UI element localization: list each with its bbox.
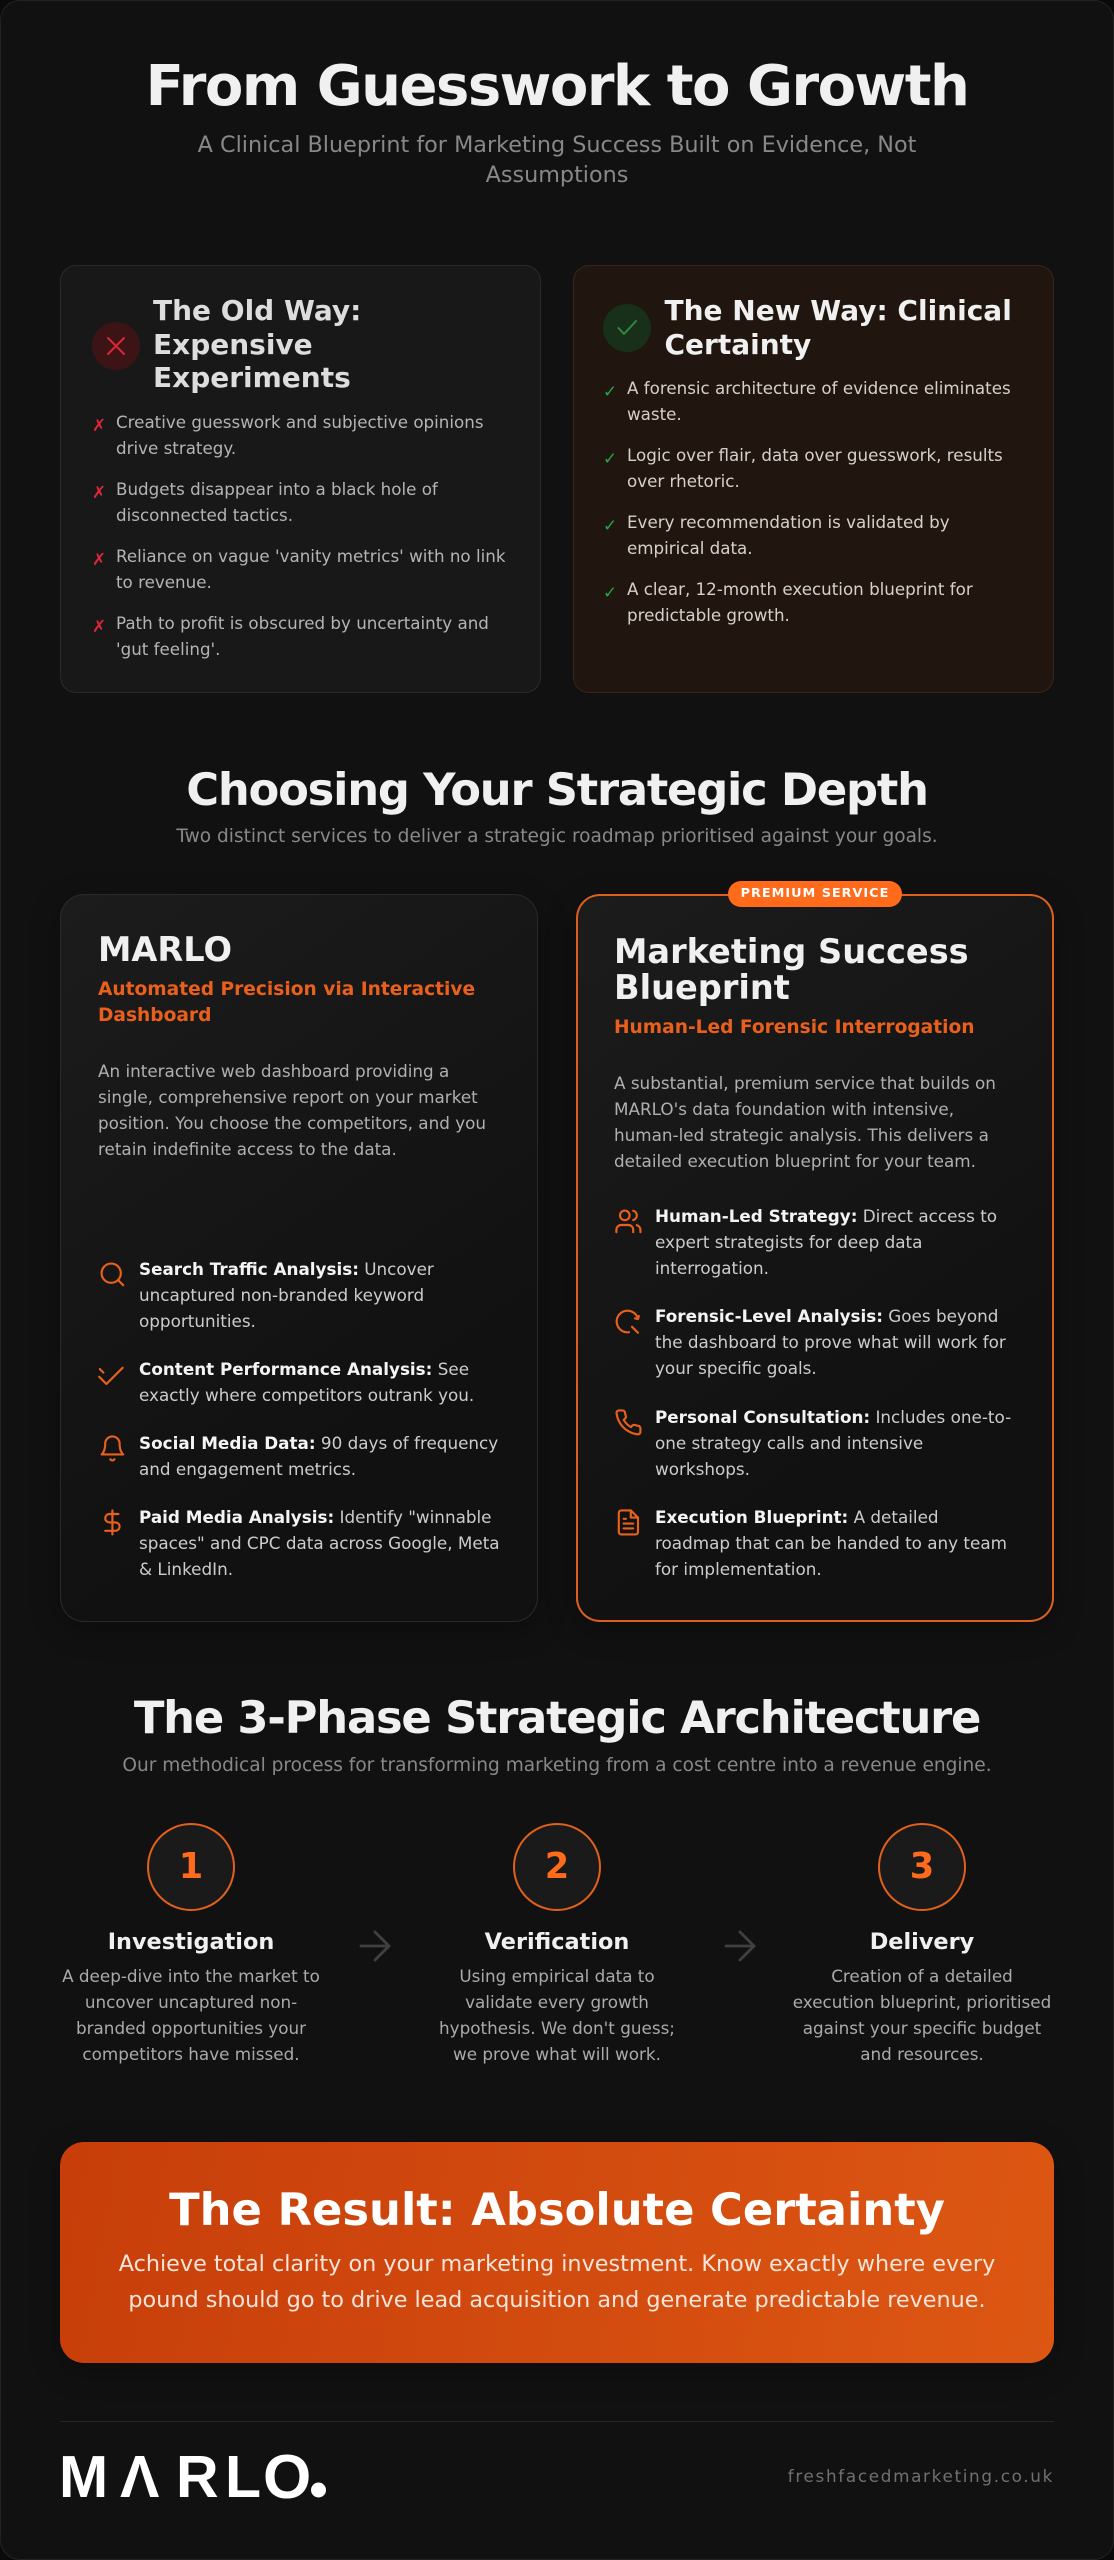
description: blueprint: A substantial, premium service that builds on — [614, 1073, 996, 1093]
text: result: Achieve total clarity on your marketing investment. Know exactly where every — [119, 2251, 995, 2277]
item: creative guesswork: ✗ — [92, 415, 106, 435]
feature: personal consultation: Personal Consultation: Includes one-to- — [655, 1407, 1011, 1427]
feature: paid media — [104, 1507, 500, 1579]
icon: check — [98, 1366, 124, 1386]
feature: execution blueprint: Execution Blueprint: A detailed — [655, 1507, 939, 1527]
tagline: MARLO: Automated Precision via Interactive — [98, 979, 475, 1000]
item: forensic architecture: A forensic architecture of evidence eliminates — [627, 378, 1011, 398]
phase 2 number — [513, 1823, 601, 1911]
item: logic over flair: Logic over flair, data over guesswork, results — [627, 445, 1003, 465]
phase 1 description: branded opportunities your — [76, 2018, 306, 2038]
subheading: strategic depth: Two distinct services to deliver a strategic roadmap prioritised against your goals. — [176, 826, 938, 847]
heading: new way: Certainty — [664, 328, 811, 361]
heading: old way: Experiments — [153, 361, 351, 394]
description: MARLO: single, comprehensive report on your market — [98, 1087, 478, 1107]
heading: blueprint: Blueprint — [614, 968, 790, 1007]
phase 3 number: 3 — [910, 1846, 934, 1887]
item: budgets: disconnected tactics. — [116, 505, 293, 525]
heading: 3-phase architecture: The 3-Phase Strategic Architecture — [134, 1691, 980, 1744]
item: vanity metrics: to revenue. — [116, 572, 212, 592]
tagline: MARLO: Dashboard — [98, 1005, 211, 1026]
heading: old way: The Old Way: — [153, 294, 361, 327]
arrow: phase 1 to 2 — [360, 1930, 390, 1962]
item: validated recommendation: ✓ — [603, 515, 617, 535]
panel: MARLO — [60, 894, 538, 1622]
feature: execution blueprint: roadmap that can be handed to any team — [655, 1533, 1007, 1553]
badge: premium service: PREMIUM SERVICE — [741, 886, 889, 901]
feature: content performance: Content Performance Analysis: See — [139, 1359, 469, 1379]
item: validated recommendation — [603, 512, 950, 558]
panel: result banner — [60, 2142, 1054, 2363]
description: blueprint — [614, 1073, 996, 1171]
feature: human-led strategy: Human-Led Strategy: Direct access to — [655, 1206, 997, 1226]
feature: paid media: Paid Media Analysis: Identify "winnable — [139, 1507, 492, 1527]
item: vanity metrics: ✗ — [92, 549, 106, 569]
phase 2 description: validate every growth — [465, 1992, 649, 2012]
phase 1 description — [62, 1966, 320, 2064]
feature: social media: and engagement metrics. — [139, 1459, 356, 1479]
phase 3 description: and resources. — [860, 2044, 984, 2064]
phase 2 description: Using empirical data to — [459, 1966, 655, 1986]
item: validated recommendation: Every recommendation is validated by — [627, 512, 950, 532]
feature: social media: Social Media Data: 90 days of frequency — [139, 1433, 498, 1453]
phase 1 description: competitors have missed. — [82, 2044, 300, 2064]
phase 3 description: Creation of a detailed — [831, 1966, 1013, 1986]
item: 12-month blueprint: A clear, 12-month execution blueprint for — [627, 579, 973, 599]
description: MARLO: position. You choose the competitors, and you — [98, 1113, 486, 1133]
heading: old way: Expensive — [153, 328, 313, 361]
phase 2 number: 2 — [545, 1846, 569, 1887]
description: MARLO: An interactive web dashboard providing a — [98, 1061, 449, 1081]
tagline: blueprint: Human-Led Forensic Interrogation — [614, 1017, 974, 1038]
item: forensic architecture: ✓ — [603, 381, 617, 401]
item: 12-month blueprint: predictable growth. — [627, 605, 790, 625]
text: result — [118, 2251, 995, 2313]
item: budgets: Budgets disappear into a black hole of — [116, 479, 438, 499]
phase 1 description: A deep-dive into the market to — [62, 1966, 320, 1986]
heading: blueprint: Marketing Success — [614, 932, 969, 971]
subtitle: Assumptions — [486, 162, 628, 188]
website: freshfacedmarketing.co.uk — [788, 2466, 1054, 2486]
badge: premium service — [728, 881, 902, 907]
phase 2 description: we prove what will work. — [453, 2044, 661, 2064]
item: path to profit: Path to profit is obscured by uncertainty and — [116, 613, 489, 633]
item: logic over flair: ✓ — [603, 448, 617, 468]
item: logic over flair: over rhetoric. — [627, 471, 740, 491]
heading: MARLO: MARLO — [98, 930, 232, 969]
feature: social media — [100, 1433, 498, 1479]
feature: forensic-level analysis — [616, 1306, 1006, 1378]
title: From Guesswork to Growth — [146, 54, 968, 119]
item: creative guesswork: drive strategy. — [116, 438, 236, 458]
feature: personal consultation: one strategy calls and intensive — [655, 1433, 923, 1453]
logo: MARLO — [60, 2450, 328, 2502]
description: MARLO: retain indefinite access to the data. — [98, 1139, 397, 1159]
icon: refresh search — [616, 1310, 640, 1334]
phase 3 description: against your specific budget — [803, 2018, 1041, 2038]
feature: paid media: spaces" and CPC data across Google, Meta — [139, 1533, 500, 1553]
heading: result: The Result: Absolute Certainty — [169, 2183, 945, 2236]
heading: strategic depth: Choosing Your Strategic Depth — [186, 763, 928, 816]
item: forensic architecture: waste. — [627, 404, 682, 424]
feature: human-led strategy: expert strategists for deep data — [655, 1232, 922, 1252]
phase 1 number: 1 — [179, 1846, 203, 1887]
feature: search traffic — [100, 1259, 434, 1331]
icon: bell — [100, 1435, 124, 1462]
item: forensic architecture — [603, 378, 1011, 424]
feature: human-led strategy: interrogation. — [655, 1258, 769, 1278]
phase 3 number — [878, 1823, 966, 1911]
feature: personal consultation: workshops. — [655, 1459, 750, 1479]
icon: users — [615, 1210, 642, 1234]
item: creative guesswork — [92, 412, 484, 458]
feature: content performance — [98, 1359, 474, 1405]
phase 2 description: hypothesis. We don't guess; — [439, 2018, 675, 2038]
item: creative guesswork: Creative guesswork and subjective opinions — [116, 412, 484, 432]
phase 1 description: uncover uncaptured non- — [85, 1992, 297, 2012]
phase 2 label: Verification — [485, 1929, 629, 1955]
icon: search — [100, 1262, 124, 1286]
feature: forensic-level analysis: the dashboard to prove what will work for — [655, 1332, 1006, 1352]
item: validated recommendation: empirical data. — [627, 538, 753, 558]
phase 3 description — [793, 1966, 1051, 2064]
feature: personal consultation — [615, 1407, 1011, 1479]
feature: forensic-level analysis: Forensic-Level Analysis: Goes beyond — [655, 1306, 998, 1326]
feature: forensic-level analysis: your specific goals. — [655, 1358, 817, 1378]
description: blueprint: human-led strategic analysis. This delivers a — [614, 1125, 989, 1145]
phase 1 label: Investigation — [108, 1929, 274, 1955]
subtitle — [198, 132, 916, 188]
icon: document — [618, 1509, 640, 1536]
feature: execution blueprint: for implementation. — [655, 1559, 822, 1579]
item: logic over flair — [603, 445, 1003, 491]
divider — [60, 2421, 1054, 2422]
phase 3 description: execution blueprint, prioritised — [793, 1992, 1051, 2012]
heading: new way: The New Way: Clinical — [664, 294, 1012, 327]
heading: blueprint — [614, 932, 969, 1007]
text: result: pound should go to drive lead acquisition and generate predictable revenue. — [128, 2287, 986, 2313]
phase 2 description — [439, 1966, 675, 2064]
subheading: 3-phase architecture: Our methodical process for transforming marketing from a cost centre into a revenue engine. — [122, 1755, 992, 1776]
icon: green check — [603, 304, 651, 352]
phase 1 number — [147, 1823, 235, 1911]
item: vanity metrics: Reliance on vague 'vanity metrics' with no link — [116, 546, 506, 566]
item: path to profit: ✗ — [92, 616, 106, 636]
item: path to profit: 'gut feeling'. — [116, 639, 220, 659]
feature: search traffic: opportunities. — [139, 1311, 256, 1331]
icon: dollar — [104, 1509, 121, 1536]
description: blueprint: MARLO's data foundation with intensive, — [614, 1099, 954, 1119]
panel: the new way — [572, 265, 1054, 693]
icon: phone — [615, 1409, 642, 1436]
item: 12-month blueprint — [603, 579, 973, 625]
feature: search traffic: Search Traffic Analysis: Uncover — [139, 1259, 434, 1279]
feature: search traffic: uncaptured non-branded keyword — [139, 1285, 424, 1305]
item: 12-month blueprint: ✓ — [603, 582, 617, 602]
item: vanity metrics — [92, 546, 506, 592]
heading: new way — [664, 294, 1012, 361]
feature: paid media: & LinkedIn. — [139, 1559, 233, 1579]
icon: red cross — [92, 322, 140, 370]
item: path to profit — [92, 613, 489, 659]
arrow: phase 2 to 3 — [724, 1930, 756, 1962]
item: budgets — [92, 479, 438, 525]
feature: human-led strategy — [615, 1206, 997, 1278]
description: blueprint: detailed execution blueprint for your team. — [614, 1151, 976, 1171]
tagline: MARLO — [98, 979, 475, 1026]
panel: the old way — [60, 265, 541, 693]
item: budgets: ✗ — [92, 482, 106, 502]
subtitle: A Clinical Blueprint for Marketing Success Built on Evidence, Not — [198, 132, 916, 158]
feature: execution blueprint — [618, 1507, 1007, 1579]
feature: content performance: exactly where competitors outrank you. — [139, 1385, 474, 1405]
heading: old way — [153, 294, 361, 394]
panel: Marketing Success Blueprint — [576, 894, 1054, 1622]
description: MARLO — [98, 1061, 486, 1159]
phase 3 label: Delivery — [870, 1929, 974, 1955]
